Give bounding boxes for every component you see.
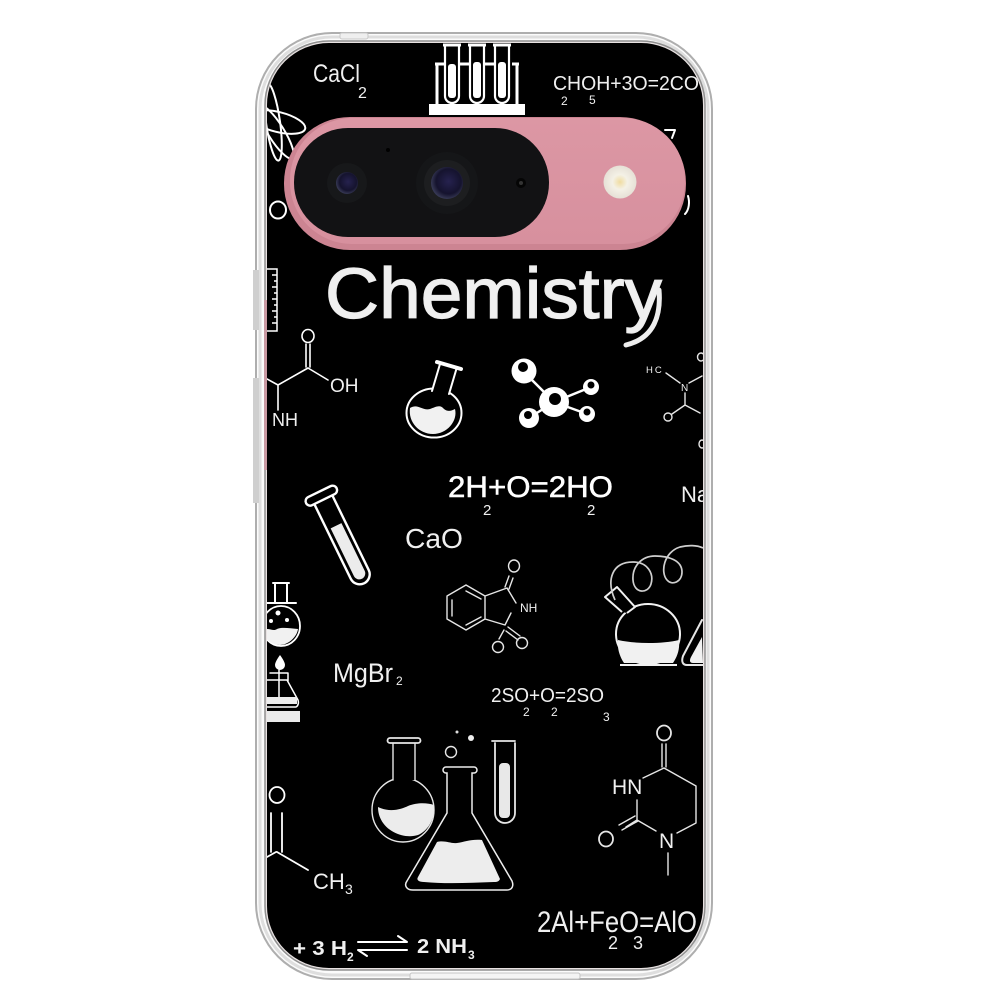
equation: water formation: 2 xyxy=(483,502,491,519)
chemical structure: uracil: HN xyxy=(612,776,642,799)
printed artwork xyxy=(248,45,710,964)
formula: CaCl2: CaCl xyxy=(313,60,360,88)
black printed back panel xyxy=(267,43,703,968)
equation: Haber process: 2 xyxy=(347,950,354,964)
equation: water formation xyxy=(449,476,612,515)
clear case shell xyxy=(256,33,712,979)
chemical structure: caffeine fragment: N xyxy=(681,383,688,394)
icon: atom xyxy=(267,84,306,162)
equation: water formation: 2H+O=2HO xyxy=(448,471,613,504)
camera bar xyxy=(284,117,686,250)
icon: molecule model xyxy=(512,358,599,428)
phone case product illustration xyxy=(253,32,713,980)
chemical structure: acetyl group: 3 xyxy=(345,881,353,897)
icon: round flask xyxy=(406,362,462,438)
icon: tilted test tube xyxy=(304,484,371,586)
equation: thermite: 2 xyxy=(608,933,618,953)
icon: molecule fragment behind camera xyxy=(665,130,689,214)
laser sensor xyxy=(516,178,526,188)
equation: Haber process xyxy=(293,936,475,964)
formula: MgBr2: MgBr xyxy=(333,658,393,688)
formula: CaCl2 xyxy=(314,64,366,98)
main lens xyxy=(416,152,478,214)
equation: sulfur trioxide: 2 xyxy=(523,705,530,719)
equation: Haber process: 3 xyxy=(468,948,475,962)
flash xyxy=(604,166,636,198)
equation: sulfur trioxide: 3 xyxy=(603,710,610,724)
icon: small round flask xyxy=(262,583,300,646)
icon: bottom glassware group xyxy=(372,730,515,890)
equation: Haber process: + 3 H xyxy=(293,938,347,960)
chemical structure: caffeine fragment: HC xyxy=(646,365,664,376)
letter O left of camera xyxy=(270,202,286,218)
formula: MgBr2: 2 xyxy=(396,674,403,688)
equation: Haber process: 2 NH xyxy=(417,936,467,958)
chemical structure: uracil xyxy=(599,726,696,875)
equation: sulfur trioxide xyxy=(492,688,610,721)
chemical structure: amino acid: NH xyxy=(272,410,298,430)
chemical structure: acetyl group: CH xyxy=(313,869,345,894)
formula: CHOH+3O=2CO xyxy=(554,76,698,105)
chemical structure: saccharin: NH xyxy=(520,601,537,615)
heading: Chemistry: Chemistry xyxy=(325,255,663,334)
chemical structure: amino acid: OH xyxy=(330,376,358,397)
formula fragment: Na: Na xyxy=(681,482,710,507)
chemical structure: caffeine fragment xyxy=(646,353,705,448)
icon: coil condenser with flasks xyxy=(605,546,703,665)
test tube xyxy=(492,741,515,823)
equation: thermite xyxy=(538,910,696,949)
formula: CaCl2: 2 xyxy=(358,85,367,102)
chemical structure: saccharin xyxy=(447,560,537,652)
formula: CHOH+3O=2CO: CHOH+3O=2CO xyxy=(553,73,699,95)
formula: CaO: CaO xyxy=(405,523,463,554)
chemical structure: acetyl group xyxy=(267,787,353,897)
equation: water formation: 2 xyxy=(587,502,595,519)
round flask xyxy=(372,738,434,842)
formula: CHOH+3O=2CO: 2 xyxy=(561,94,568,108)
bubbles xyxy=(446,730,474,758)
icon: burner xyxy=(267,655,300,722)
chemical structure: amino acid xyxy=(267,330,358,430)
dark lens window xyxy=(294,128,549,237)
chemical structure: uracil: N xyxy=(659,830,674,853)
icon: test tube rack xyxy=(429,45,525,115)
formula: CHOH+3O=2CO: 5 xyxy=(589,93,596,107)
conical flask xyxy=(406,767,513,890)
equation: thermite: 3 xyxy=(633,933,643,953)
equation: thermite: 2Al+FeO=AlO xyxy=(537,906,697,939)
equation: sulfur trioxide: 2SO+O=2SO xyxy=(491,685,604,707)
equation: sulfur trioxide: 2 xyxy=(551,705,558,719)
icon: graduated cylinder xyxy=(267,269,277,331)
secondary lens xyxy=(327,163,367,203)
microphone dot xyxy=(386,148,390,152)
